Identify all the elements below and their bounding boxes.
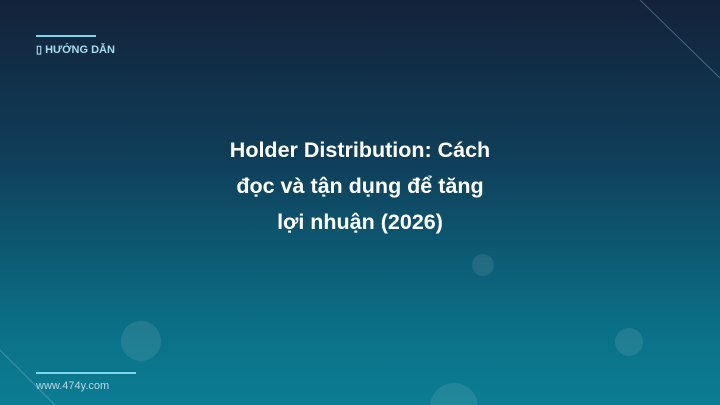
bottom accent bar: [36, 372, 136, 374]
category label: ▯ HƯỚNG DẪN: [36, 44, 115, 56]
top accent bar: [36, 35, 96, 37]
title: Holder Distribution: Cách: [230, 138, 490, 162]
title: đọc và tận dụng để tăng: [236, 174, 484, 198]
title: lợi nhuận (2026): [277, 210, 443, 234]
title: [230, 138, 490, 234]
website: www.474y.com: [36, 380, 109, 392]
